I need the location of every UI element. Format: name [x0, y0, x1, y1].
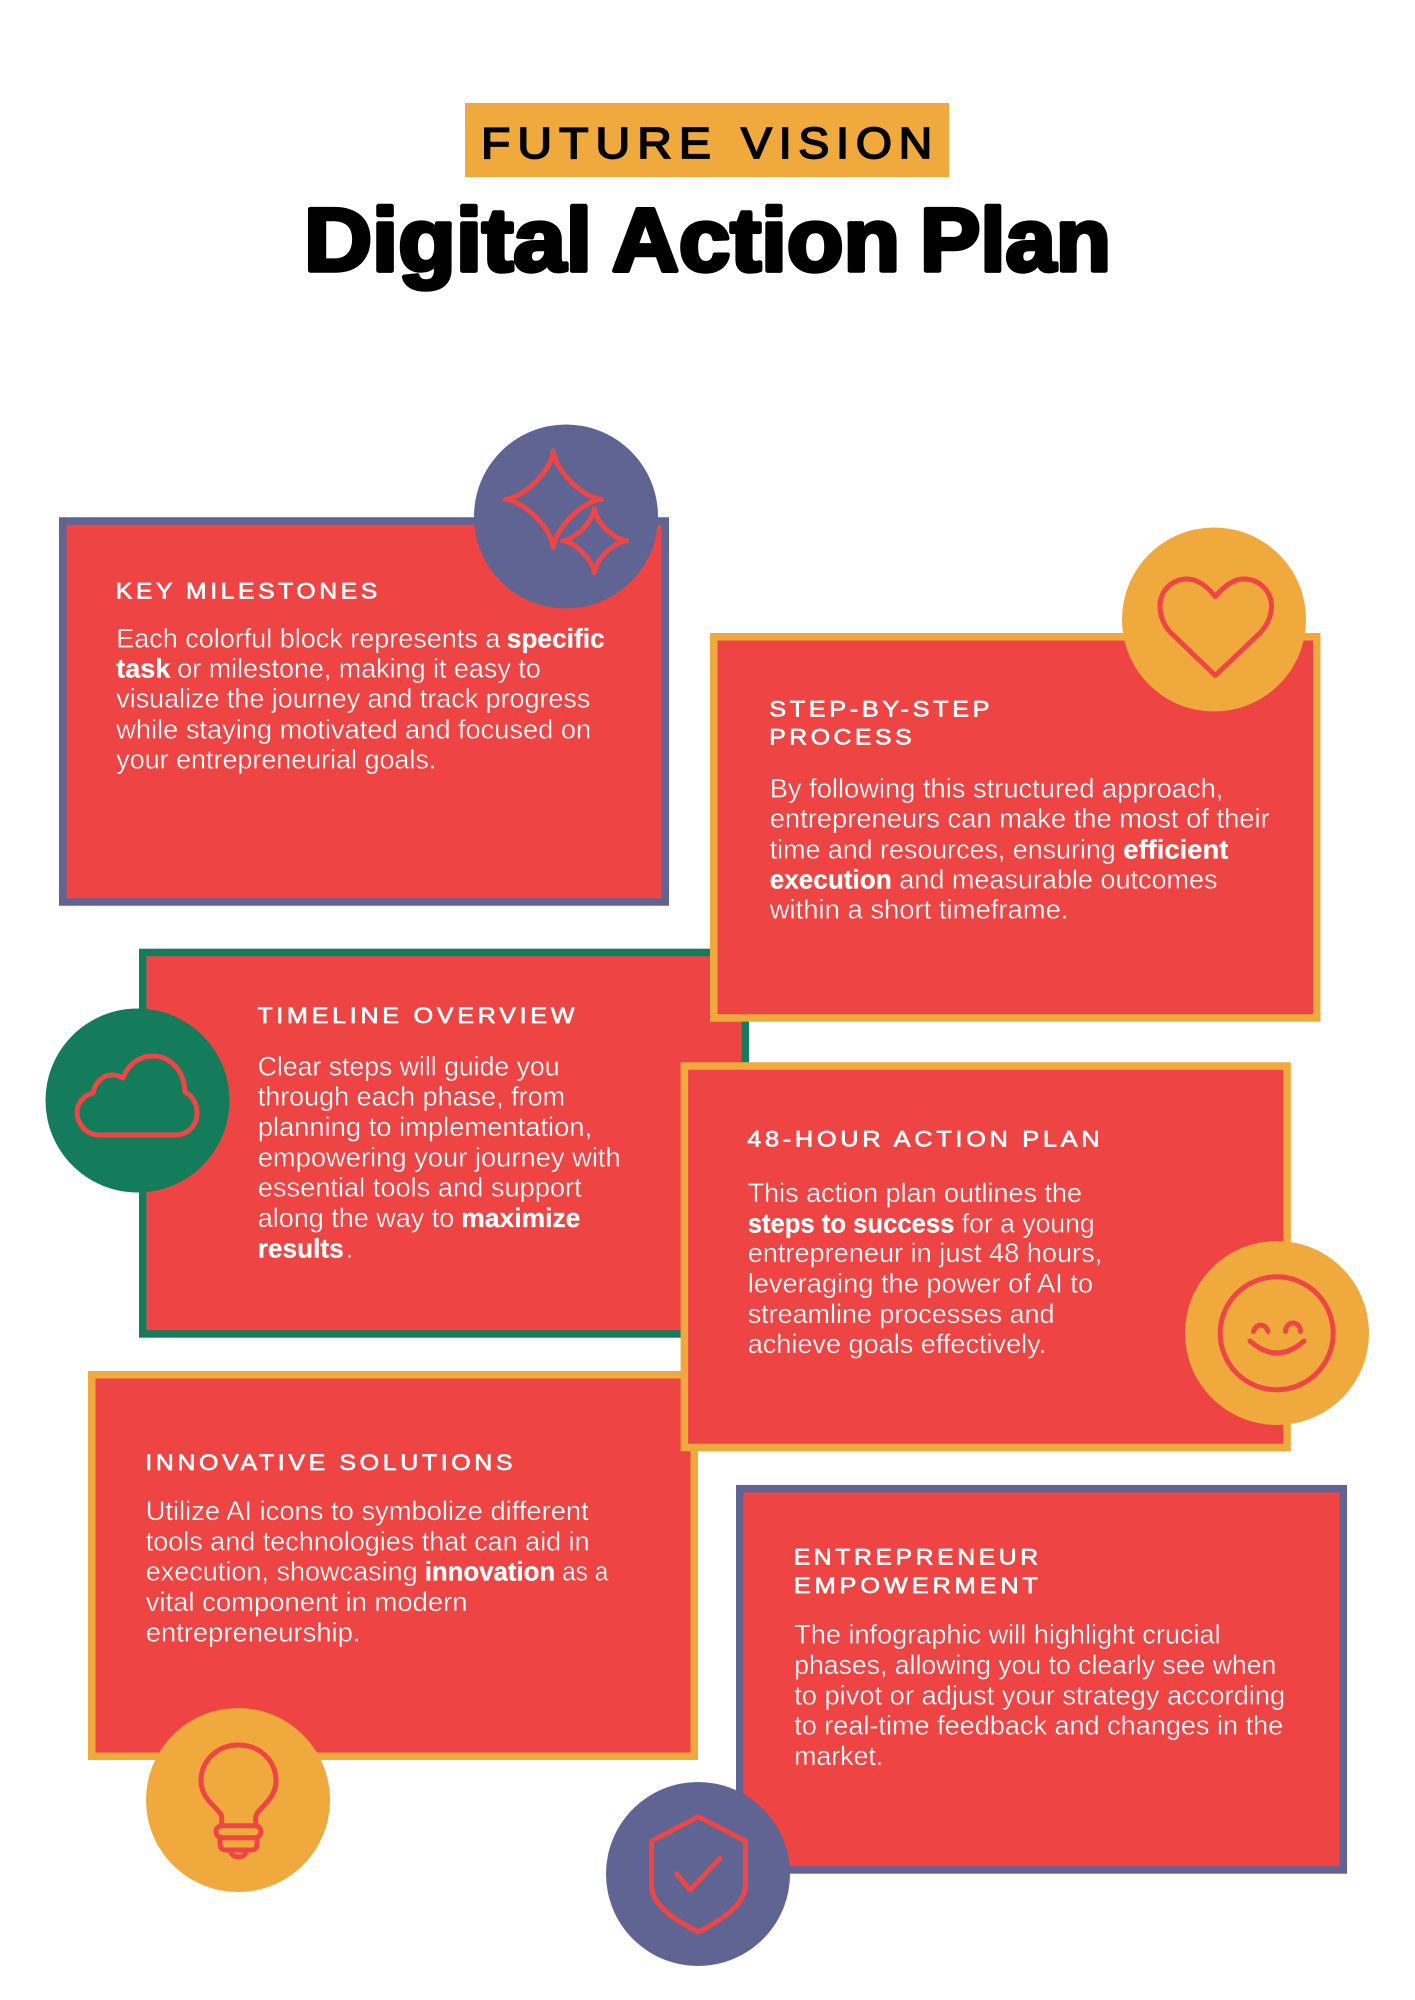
- title: [304, 190, 1111, 290]
- badge: future vision: [465, 103, 949, 177]
- heading: key milestones: KEY MILESTONES: [116, 578, 381, 604]
- panel: innovative solutions: [92, 1375, 694, 1892]
- heading: innovative solutions: INNOVATIVE SOLUTIONS: [145, 1450, 516, 1475]
- body text: steps to success: [748, 1208, 954, 1238]
- heading: step-by-step process: STEP-BY-STEP: [769, 696, 993, 722]
- title: Action: [612, 190, 900, 290]
- body text: execution, showcasing: [146, 1557, 418, 1587]
- icon: smiley: [1185, 1241, 1369, 1425]
- body text: achieve goals effectively.: [748, 1329, 1046, 1359]
- icon: sparkles: [474, 424, 658, 608]
- body text: execution: [770, 865, 892, 895]
- heading: step-by-step process: PROCESS: [769, 724, 915, 750]
- icon: cloud: [46, 1008, 230, 1192]
- body text: [146, 1496, 609, 1647]
- panel: 48-hour action plan: [684, 1066, 1369, 1448]
- icon: shield with check: [606, 1782, 790, 1966]
- body text: entrepreneurship.: [146, 1617, 360, 1647]
- icon: heart: [1122, 528, 1306, 712]
- heading: entrepreneur empowerment: [794, 1544, 1042, 1598]
- body text: as a: [562, 1557, 609, 1587]
- heading: step-by-step process: [769, 696, 993, 750]
- body text: entrepreneurs can make the most of their: [770, 804, 1270, 834]
- body text: to pivot or adjust your strategy according: [794, 1680, 1285, 1710]
- title: Plan: [920, 190, 1111, 290]
- badge: future vision: FUTURE: [481, 119, 718, 168]
- body text: Each colorful block represents a: [116, 623, 501, 653]
- body text: Utilize AI icons to symbolize different: [146, 1496, 589, 1526]
- badge: future vision: VISION: [741, 119, 939, 168]
- body text: The infographic will highlight crucial: [794, 1619, 1221, 1649]
- body text: visualize the journey and track progress: [116, 684, 590, 714]
- panel: step-by-step process: [714, 528, 1317, 1018]
- heading: entrepreneur empowerment: EMPOWERMENT: [794, 1573, 1042, 1598]
- body text: planning to implementation,: [258, 1112, 592, 1142]
- body text: and measurable outcomes: [899, 865, 1218, 895]
- card background: [143, 952, 745, 1334]
- heading: entrepreneur empowerment: ENTREPRENEUR: [794, 1544, 1042, 1570]
- body text: essential tools and support: [258, 1173, 582, 1203]
- heading: 48-hour action plan: 48-HOUR ACTION PLAN: [747, 1126, 1103, 1152]
- title: Digital: [304, 190, 592, 290]
- card background: [684, 1066, 1287, 1448]
- body text: [258, 1052, 621, 1263]
- body text: or milestone, making it easy to: [177, 654, 541, 684]
- body text: leveraging the power of AI to: [748, 1269, 1093, 1299]
- body text: This action plan outlines the: [748, 1178, 1082, 1208]
- body text: By following this structured approach,: [770, 773, 1223, 803]
- header: [304, 103, 1111, 290]
- body text: task: [116, 654, 171, 684]
- body text: time and resources, ensuring: [770, 834, 1116, 864]
- body text: within a short timeframe.: [769, 895, 1069, 925]
- icon: light bulb: [146, 1708, 330, 1892]
- body text: [769, 773, 1270, 925]
- body text: streamline processes and: [748, 1299, 1055, 1329]
- body text: along the way to: [258, 1203, 454, 1233]
- body text: [748, 1178, 1102, 1359]
- body text: market.: [794, 1741, 883, 1771]
- body text: .: [346, 1233, 353, 1263]
- body text: vital component in modern: [146, 1587, 467, 1617]
- body text: phases, allowing you to clearly see when: [794, 1650, 1276, 1680]
- body text: maximize: [461, 1203, 580, 1233]
- body text: efficient: [1123, 834, 1228, 864]
- panel: entrepreneur empowerment: [606, 1489, 1343, 1966]
- body text: [115, 623, 605, 774]
- body text: entrepreneur in just 48 hours,: [748, 1238, 1102, 1268]
- card background: [714, 637, 1317, 1018]
- body text: Clear steps will guide you: [258, 1052, 559, 1082]
- panel: timeline overview: [46, 952, 745, 1334]
- heading: timeline overview: TIMELINE OVERVIEW: [257, 1003, 578, 1028]
- body text: to real-time feedback and changes in the: [794, 1710, 1283, 1740]
- body text: for a young: [962, 1208, 1095, 1238]
- panel: key milestones: [63, 424, 665, 902]
- body text: through each phase, from: [258, 1082, 565, 1112]
- body text: results: [258, 1233, 344, 1263]
- body text: while staying motivated and focused on: [115, 714, 591, 744]
- body text: [794, 1619, 1285, 1771]
- body text: your entrepreneurial goals.: [116, 744, 436, 774]
- card background: [740, 1489, 1343, 1870]
- card background: [92, 1375, 694, 1756]
- body text: specific: [507, 623, 605, 653]
- card background: [63, 521, 665, 902]
- body text: empowering your journey with: [258, 1143, 621, 1173]
- body text: tools and technologies that can aid in: [146, 1526, 590, 1556]
- body text: innovation: [425, 1557, 555, 1587]
